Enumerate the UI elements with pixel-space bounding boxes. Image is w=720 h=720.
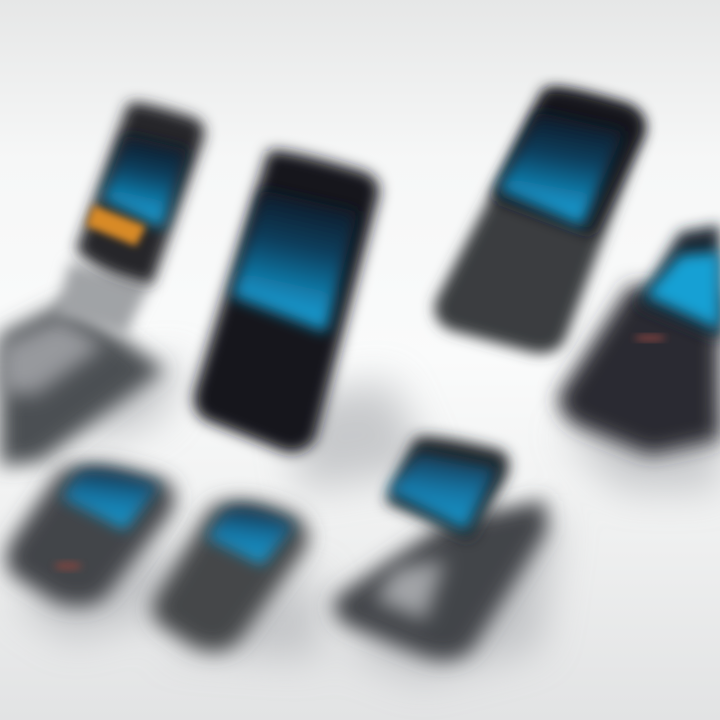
screen xyxy=(388,452,497,530)
soft shadows xyxy=(10,360,720,680)
red accent xyxy=(54,562,82,570)
phone: right phone xyxy=(558,225,720,455)
screen xyxy=(102,135,188,228)
phone: center black phone xyxy=(194,151,379,452)
phone: upper right phone xyxy=(435,89,644,353)
upper body xyxy=(76,103,204,285)
upper body xyxy=(385,436,509,540)
orange band xyxy=(86,205,146,246)
phone: bottom right flip phone xyxy=(334,436,548,660)
phone: left flip phone xyxy=(0,103,204,466)
keypad base xyxy=(0,300,165,466)
phone: bottom left phone xyxy=(6,464,175,606)
hinge xyxy=(55,262,150,335)
phone: bottom center phone xyxy=(152,500,308,651)
screen xyxy=(498,112,624,226)
red accent xyxy=(634,335,666,341)
keypad base xyxy=(334,500,548,660)
screen xyxy=(62,469,160,530)
screen xyxy=(232,190,358,332)
screen xyxy=(645,252,720,330)
screen xyxy=(207,507,295,565)
